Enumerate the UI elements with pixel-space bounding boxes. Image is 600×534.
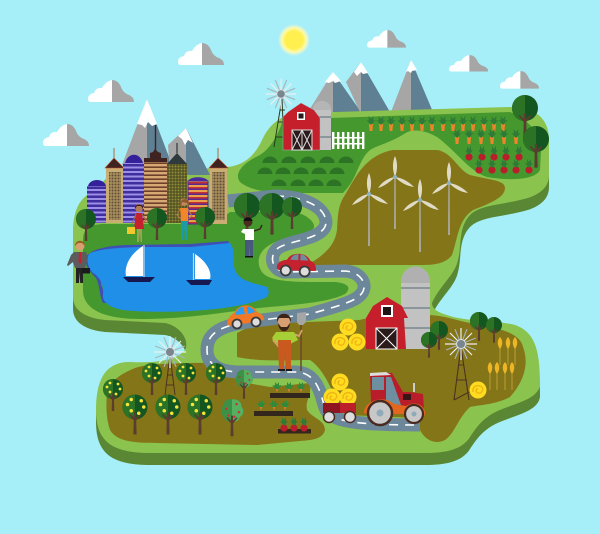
vegetable planters (254, 382, 311, 434)
tractor (364, 372, 425, 425)
sun (278, 24, 310, 56)
lower silo (401, 266, 430, 349)
building purple tall (123, 155, 144, 223)
person: woman in orange top (177, 198, 192, 240)
sailboats (123, 245, 212, 285)
cabbage rows (258, 156, 354, 186)
orchard trees (103, 363, 253, 436)
dark green city field (83, 212, 348, 319)
red car (276, 253, 317, 277)
upper red barn (283, 103, 320, 150)
carrot rows (366, 116, 520, 144)
island side thickness (73, 119, 549, 465)
clouds (43, 30, 539, 146)
person: woman with yellow bag (127, 204, 146, 242)
boat right (186, 253, 212, 285)
island top surface (73, 107, 549, 453)
person: man in white shirt (241, 217, 262, 258)
upper right trees (512, 95, 549, 168)
back mountains (308, 60, 433, 112)
farmer with hoe (272, 312, 306, 371)
single hay bale (470, 382, 486, 398)
orange car (227, 305, 264, 328)
trailer with hay (323, 374, 356, 422)
olive wind farm field (307, 150, 505, 265)
wind turbines (352, 156, 468, 252)
building red striped (188, 177, 208, 224)
trees near lower barn (421, 312, 502, 358)
city skyline (87, 125, 228, 224)
lake (86, 241, 269, 312)
boat left (123, 245, 155, 282)
building dark olive (167, 143, 187, 223)
lower right windmill (445, 328, 477, 400)
white fence (332, 132, 364, 149)
dark green crop field (238, 112, 541, 193)
mountains behind city (122, 99, 210, 175)
building tan striped (144, 125, 167, 223)
upper windmill (266, 79, 296, 147)
building tan left (105, 148, 124, 223)
beet rows (465, 146, 533, 174)
wheat stalks (488, 337, 517, 390)
lower windmill (154, 336, 186, 395)
road (207, 196, 420, 425)
building purple small (87, 180, 107, 223)
olive lower right field (237, 315, 526, 442)
hay bales stack (332, 318, 366, 350)
person: businessman with briefcase (67, 241, 90, 283)
trees by lake and road (76, 193, 302, 241)
olive lower left field (106, 363, 325, 445)
building tan right (209, 148, 228, 224)
upper silo (313, 101, 331, 150)
lower red barn (366, 297, 408, 349)
